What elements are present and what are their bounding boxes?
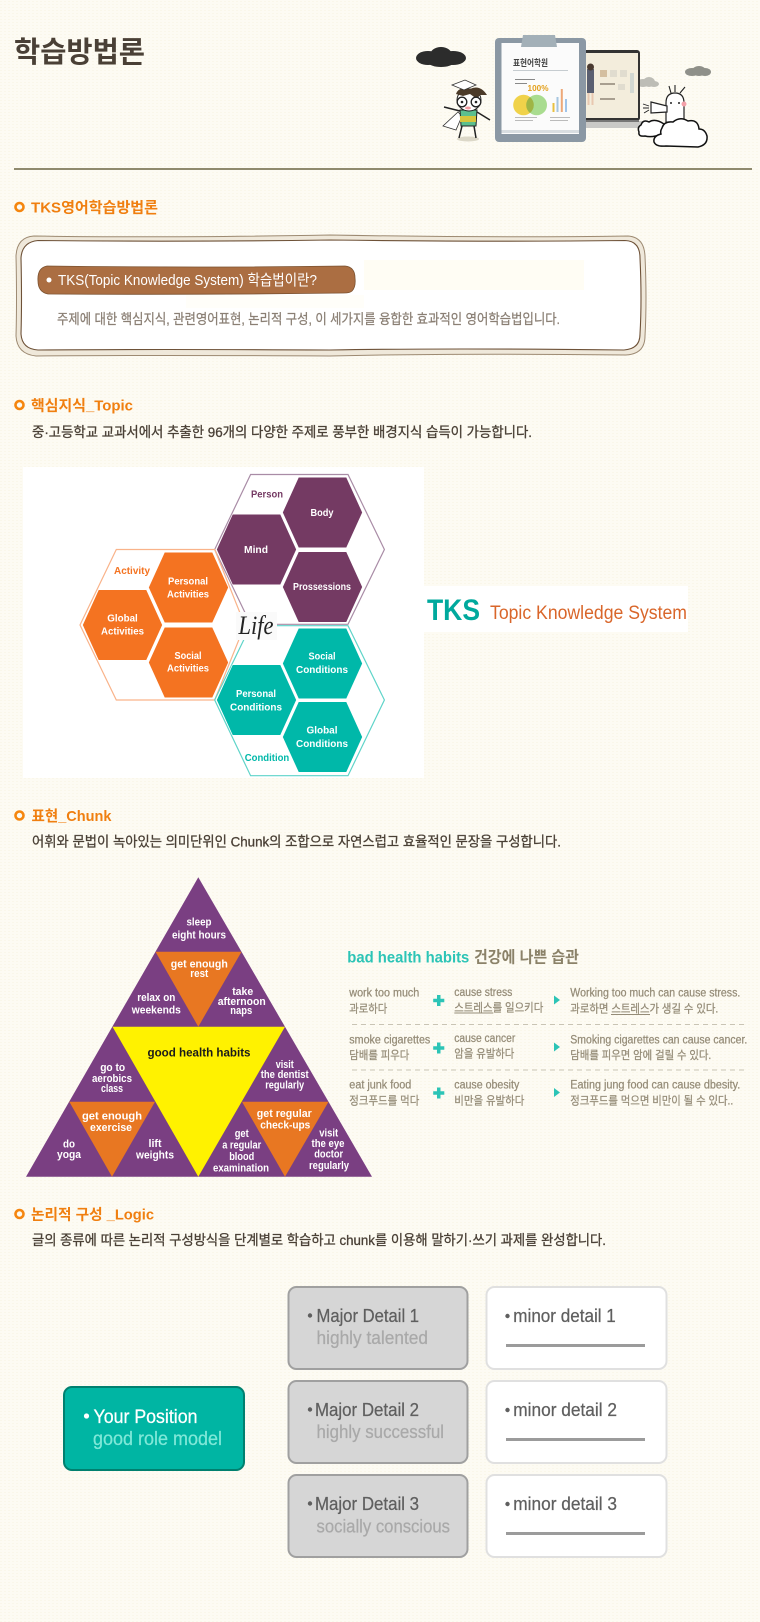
- logo: TKS Topic Knowledge System: [424, 586, 688, 632]
- icon: pale grey cloud: [637, 77, 659, 87]
- hex group: Person: Mind: [244, 545, 268, 556]
- panel: TKS definition frame: [16, 235, 646, 356]
- triangle chart: good health habits: blood: [229, 1151, 254, 1163]
- box: minor detail 1: [486, 1287, 666, 1369]
- triangle chart: good health habits: lift: [148, 1138, 162, 1150]
- row: work too much: work too much: [348, 988, 419, 1000]
- clipboard title: 표현어학원: [513, 57, 548, 68]
- triangle chart: good health habits: visit: [276, 1059, 294, 1071]
- hex group: Condition: Personal: [236, 689, 276, 700]
- row: work too much: Working too much can cause stress.: [570, 988, 740, 1000]
- box: major detail 1: Major Detail 1: [316, 1306, 419, 1326]
- character: megaphone figure on cloud: [638, 85, 707, 147]
- hex group: Condition: Global: [306, 726, 338, 736]
- laptop: [580, 50, 648, 128]
- triangle chart: good health habits: exercise: [90, 1122, 132, 1134]
- row: eat junk food: 정크푸드를 먹으면 비만이 될 수 있다..: [570, 1094, 733, 1108]
- box: major detail 3: [288, 1475, 468, 1557]
- triangle chart: good health habits: yoga: [57, 1149, 82, 1161]
- row: work too much: 과로하다: [349, 1002, 388, 1016]
- hex group: Condition: Conditions: [230, 702, 282, 714]
- triangle chart: good health habits: weights: [135, 1150, 174, 1162]
- title: 학습방법론: [14, 36, 145, 69]
- triangle chart: good health habits: get regular: [257, 1108, 312, 1120]
- triangle chart: good health habits: take: [232, 986, 253, 998]
- box: major detail 1: [288, 1287, 468, 1369]
- hex group: Activity: Activities: [167, 590, 209, 600]
- triangle chart: good health habits: a regular: [222, 1140, 262, 1152]
- panel heading: bad health habits: [347, 950, 469, 966]
- row: work too much: 과로하면 스트레스가 생길 수 있다.: [570, 1002, 718, 1016]
- hex group: Condition: Conditions: [296, 739, 348, 750]
- row: smoke cigarettes: cause cancer: [454, 1033, 515, 1045]
- row: smoke cigarettes: 담배를 피우면 암에 걸릴 수 있다.: [570, 1049, 711, 1062]
- triangle chart: good health habits: get enough: [82, 1110, 142, 1122]
- row: work too much: [348, 987, 740, 1016]
- character: graduate boy: [443, 80, 490, 142]
- hex group: Activity: Personal: [168, 576, 208, 588]
- row: work too much: cause stress: [454, 987, 513, 999]
- hex group: Person: [216, 477, 362, 622]
- box: major detail 1: highly talented: [316, 1328, 428, 1348]
- triangle chart: good health habits: get: [235, 1128, 249, 1140]
- triangle chart: good health habits: go to: [100, 1062, 125, 1074]
- pill heading: [38, 266, 355, 294]
- row: eat junk food: eat junk food: [349, 1080, 411, 1092]
- triangle chart: good health habits: do: [63, 1138, 75, 1150]
- hex group: Activity: Activities: [101, 626, 144, 638]
- hex group: Activity: [82, 552, 228, 698]
- icon: orange ring bullet: [16, 203, 24, 211]
- box: minor detail 3: minor detail 3: [513, 1494, 617, 1514]
- box: your position: good role model: [93, 1429, 222, 1450]
- icon: orange ring bullet: [16, 1210, 24, 1218]
- icon: black scribble cloud: [416, 47, 466, 67]
- hex group: Condition: [216, 628, 362, 772]
- row: eat junk food: [349, 1080, 740, 1108]
- triangle chart: good health habits: check-ups: [260, 1120, 310, 1132]
- box: minor detail 1: minor detail 1: [513, 1306, 616, 1326]
- description: Topic: 중·고등학교 교과서에서 추출한 96개의 다양한 주제로 풍부한 배경지식 습득이 가능합니다.: [32, 424, 532, 440]
- hex group: Activity: Activity: [114, 566, 150, 577]
- heading: TKS: TKS영어학습방법론: [31, 200, 158, 216]
- hexagon group outlines: [80, 474, 384, 776]
- triangle chart: good health habits: afternoon: [218, 996, 266, 1008]
- triangle chart: good health habits: naps: [230, 1005, 252, 1017]
- triangle chart: good health habits: [26, 877, 372, 1177]
- row: eat junk food: Eating jung food can cause dbesity.: [570, 1080, 740, 1092]
- pill heading: TKS(Topic Knowledge System) 학습법이란?: [58, 272, 317, 289]
- header illustration: [416, 35, 711, 147]
- panel heading: 건강에 나쁜 습관: [474, 948, 579, 966]
- hex group: Activity: Social: [174, 651, 202, 662]
- triangle chart: good health habits: weekends: [131, 1004, 181, 1016]
- box: your position: [64, 1387, 244, 1470]
- row: smoke cigarettes: 암을 유발하다: [454, 1046, 515, 1060]
- hex group: Condition: Social: [308, 652, 336, 662]
- triangle chart: good health habits: relax on: [137, 992, 176, 1004]
- hex group: Condition: Conditions: [296, 665, 348, 676]
- box: major detail 2: Major Detail 2: [315, 1400, 419, 1420]
- icon: grey cloud right: [685, 66, 711, 76]
- center label: Life: Life: [238, 611, 274, 640]
- box: minor detail 2: minor detail 2: [513, 1400, 617, 1420]
- icon: orange ring bullet: [16, 401, 24, 409]
- row: smoke cigarettes: 담배를 피우다: [349, 1049, 410, 1062]
- box: major detail 2: [288, 1381, 468, 1463]
- triangle chart: good health habits: class: [101, 1083, 123, 1095]
- section: Topic: [16, 398, 688, 778]
- row: eat junk food: 비만을 유발하다: [454, 1094, 525, 1108]
- section: Chunk: [16, 808, 748, 1177]
- row: eat junk food: 정크푸드를 먹다: [349, 1094, 420, 1108]
- row: work too much: 스트레스를 일으키다: [454, 1000, 544, 1014]
- heading: Chunk: 표현_Chunk: [32, 808, 112, 825]
- box: major detail 3: Major Detail 3: [315, 1494, 419, 1514]
- section: TKS method: [16, 200, 646, 356]
- hex group: Condition: Condition: [245, 753, 289, 764]
- hex group: Person: Person: [251, 490, 283, 500]
- definition text: 주제에 대한 핵심지식, 관련영어표현, 논리적 구성, 이 세가지를 융합한 효과적인 영어학습법입니다.: [57, 311, 560, 327]
- triangle chart: good health habits: eight hours: [172, 930, 226, 942]
- triangle chart: good health habits: regularly: [309, 1160, 350, 1172]
- box: minor detail 3: [486, 1475, 666, 1557]
- logo: TKS Topic Knowledge System: TKS: [427, 594, 480, 627]
- row: eat junk food: cause obesity: [454, 1080, 520, 1092]
- row: smoke cigarettes: smoke cigarettes: [349, 1034, 431, 1046]
- hexagon diagram: [23, 467, 424, 778]
- box: major detail 2: highly successful: [316, 1422, 444, 1442]
- row: smoke cigarettes: Smoking cigarettes can cause cancer.: [570, 1034, 747, 1046]
- triangle chart: good health habits: visit: [319, 1128, 338, 1140]
- box: minor detail 2: [486, 1381, 666, 1463]
- icon: orange ring bullet: [16, 812, 24, 820]
- box: your position: Your Position: [94, 1407, 198, 1428]
- clipboard figure: 100%: [528, 84, 548, 93]
- triangle chart: good health habits: aerobics: [92, 1073, 132, 1085]
- clipboard: [495, 35, 586, 142]
- section: Logic: [16, 1206, 666, 1557]
- divider: [14, 168, 752, 170]
- triangle chart: good health habits: examination: [213, 1162, 269, 1174]
- triangle chart: good health habits: rest: [190, 968, 209, 980]
- logo: TKS Topic Knowledge System: Topic Knowledge System: [490, 603, 687, 624]
- description: Logic: 글의 종류에 따른 논리적 구성방식을 단계별로 학습하고 chunk를 이용해 말하기·쓰기 과제를 완성합니다.: [32, 1232, 606, 1248]
- triangle chart: good health habits: the eye: [312, 1138, 344, 1150]
- triangle chart: good health habits: sleep: [186, 916, 212, 928]
- hex group: Person: Prossessions: [293, 582, 351, 593]
- hex group: Activity: Global: [107, 614, 138, 624]
- triangle chart: good health habits: regularly: [265, 1080, 305, 1092]
- panel heading: [347, 948, 579, 966]
- heading: Topic: 핵심지식_Topic: [31, 398, 133, 414]
- panel: bad health habits: [347, 948, 748, 1108]
- description: Chunk: 어휘와 문법이 녹아있는 의미단위인 Chunk의 조합으로 자연스럽고 효율적인 문장을 구성합니다.: [32, 834, 561, 850]
- box: major detail 3: socially conscious: [316, 1516, 450, 1536]
- heading: Logic: 논리적 구성 _Logic: [31, 1206, 154, 1224]
- row: smoke cigarettes: [349, 1033, 747, 1062]
- triangle chart: good health habits: get enough: [171, 958, 228, 970]
- triangle chart: good health habits: doctor: [314, 1148, 344, 1160]
- triangle chart: good health habits: the dentist: [261, 1069, 309, 1081]
- triangle chart: good health habits: good health habits: [148, 1046, 251, 1060]
- hex group: Activity: Activities: [167, 664, 209, 674]
- hex group: Person: Body: [310, 508, 334, 519]
